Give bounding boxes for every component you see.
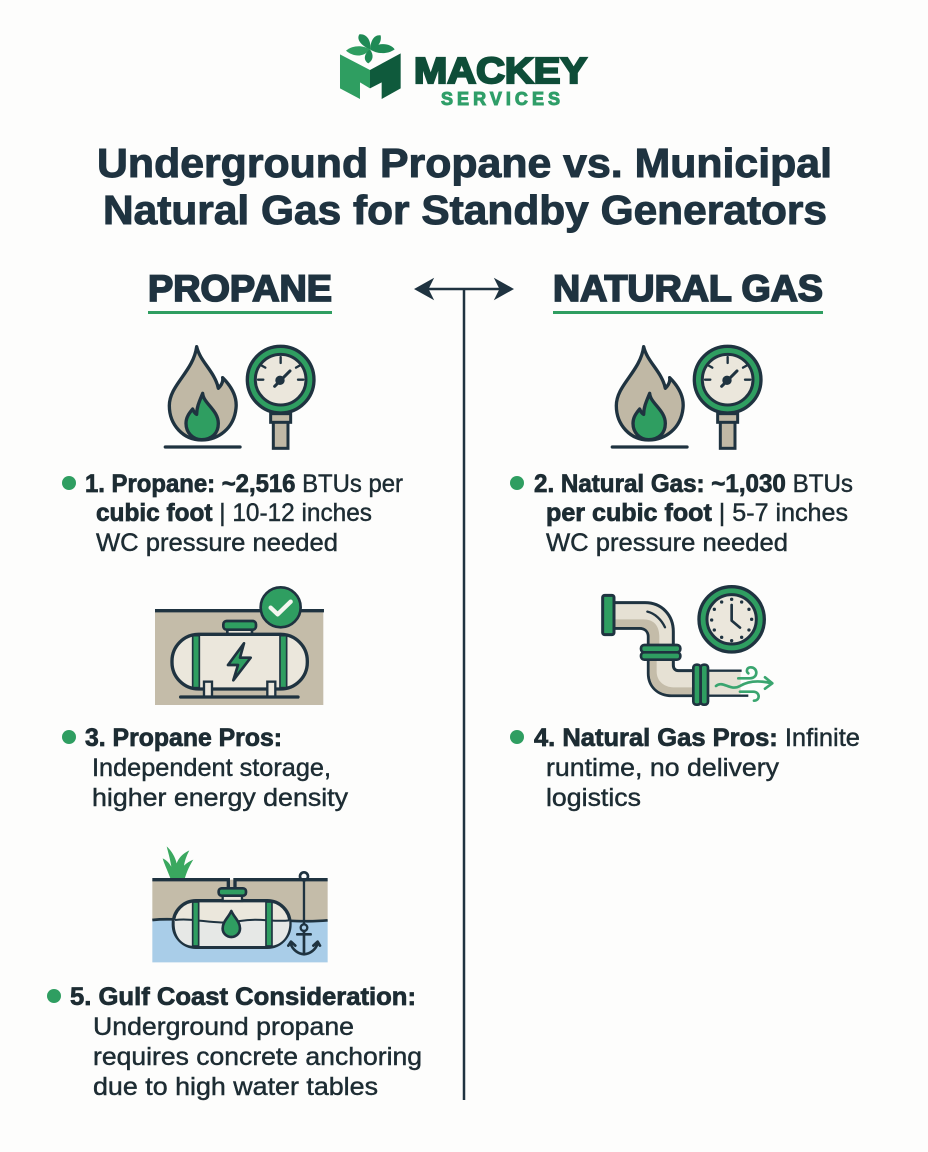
icon: underground anchored tank <box>152 846 328 962</box>
text: gulf coast consideration: requires concrete anchoring <box>93 1043 422 1071</box>
icon: pinwheel cube <box>340 34 401 99</box>
text: propane pros <box>62 724 349 812</box>
heading: propane: PROPANE <box>148 268 332 309</box>
wordmark: SERVICES: SERVICES <box>441 89 560 109</box>
text: gulf coast consideration: Underground propane <box>93 1013 354 1041</box>
text: propane energy: WC pressure needed <box>96 529 338 557</box>
text: natural gas pros: logistics <box>546 784 641 812</box>
icon: natural gas pipe with clock <box>603 587 772 705</box>
bullet <box>510 730 524 744</box>
text: propane energy: 1. Propane: ~2,516 BTUs per <box>85 470 403 498</box>
text: natural gas energy: per cubic foot | 5-7 inches <box>546 499 848 527</box>
arrow: central divider <box>415 279 513 1100</box>
logo: Mackey Services <box>340 34 587 109</box>
text: propane energy <box>62 470 403 557</box>
title: Natural Gas for Standby Generators <box>103 187 827 233</box>
text: propane energy: cubic foot | 10-12 inches <box>96 499 372 527</box>
bullet <box>47 989 61 1003</box>
bullet <box>62 476 76 490</box>
text: natural gas energy: 2. Natural Gas: ~1,030 BTUs <box>534 470 853 498</box>
text: propane pros: higher energy density <box>92 784 349 812</box>
text: gulf coast consideration <box>47 983 422 1101</box>
text: natural gas pros: 4. Natural Gas Pros: Infinite <box>534 724 860 752</box>
text: gulf coast consideration: 5. Gulf Coast Consideration: <box>70 983 416 1011</box>
text: propane pros: Independent storage, <box>92 754 331 782</box>
text: natural gas pros: runtime, no delivery <box>546 754 780 782</box>
text: natural gas energy <box>510 470 853 557</box>
icon: above-ground propane tank with check <box>155 587 324 705</box>
text: gulf coast consideration: due to high water tables <box>93 1073 378 1101</box>
text: natural gas pros <box>510 724 860 812</box>
icon: flame and gauge (natural gas) <box>612 346 761 448</box>
text: propane pros: 3. Propane Pros: <box>85 724 282 752</box>
icon: flame and gauge (propane) <box>165 346 314 448</box>
bullet <box>62 730 76 744</box>
title: Underground Propane vs. Municipal <box>97 140 832 186</box>
title <box>97 140 832 233</box>
bullet <box>510 476 524 490</box>
wordmark: MACKEY: MACKEY <box>414 50 587 91</box>
text: natural gas energy: WC pressure needed <box>546 529 788 557</box>
heading: natural gas: NATURAL GAS <box>553 268 823 309</box>
